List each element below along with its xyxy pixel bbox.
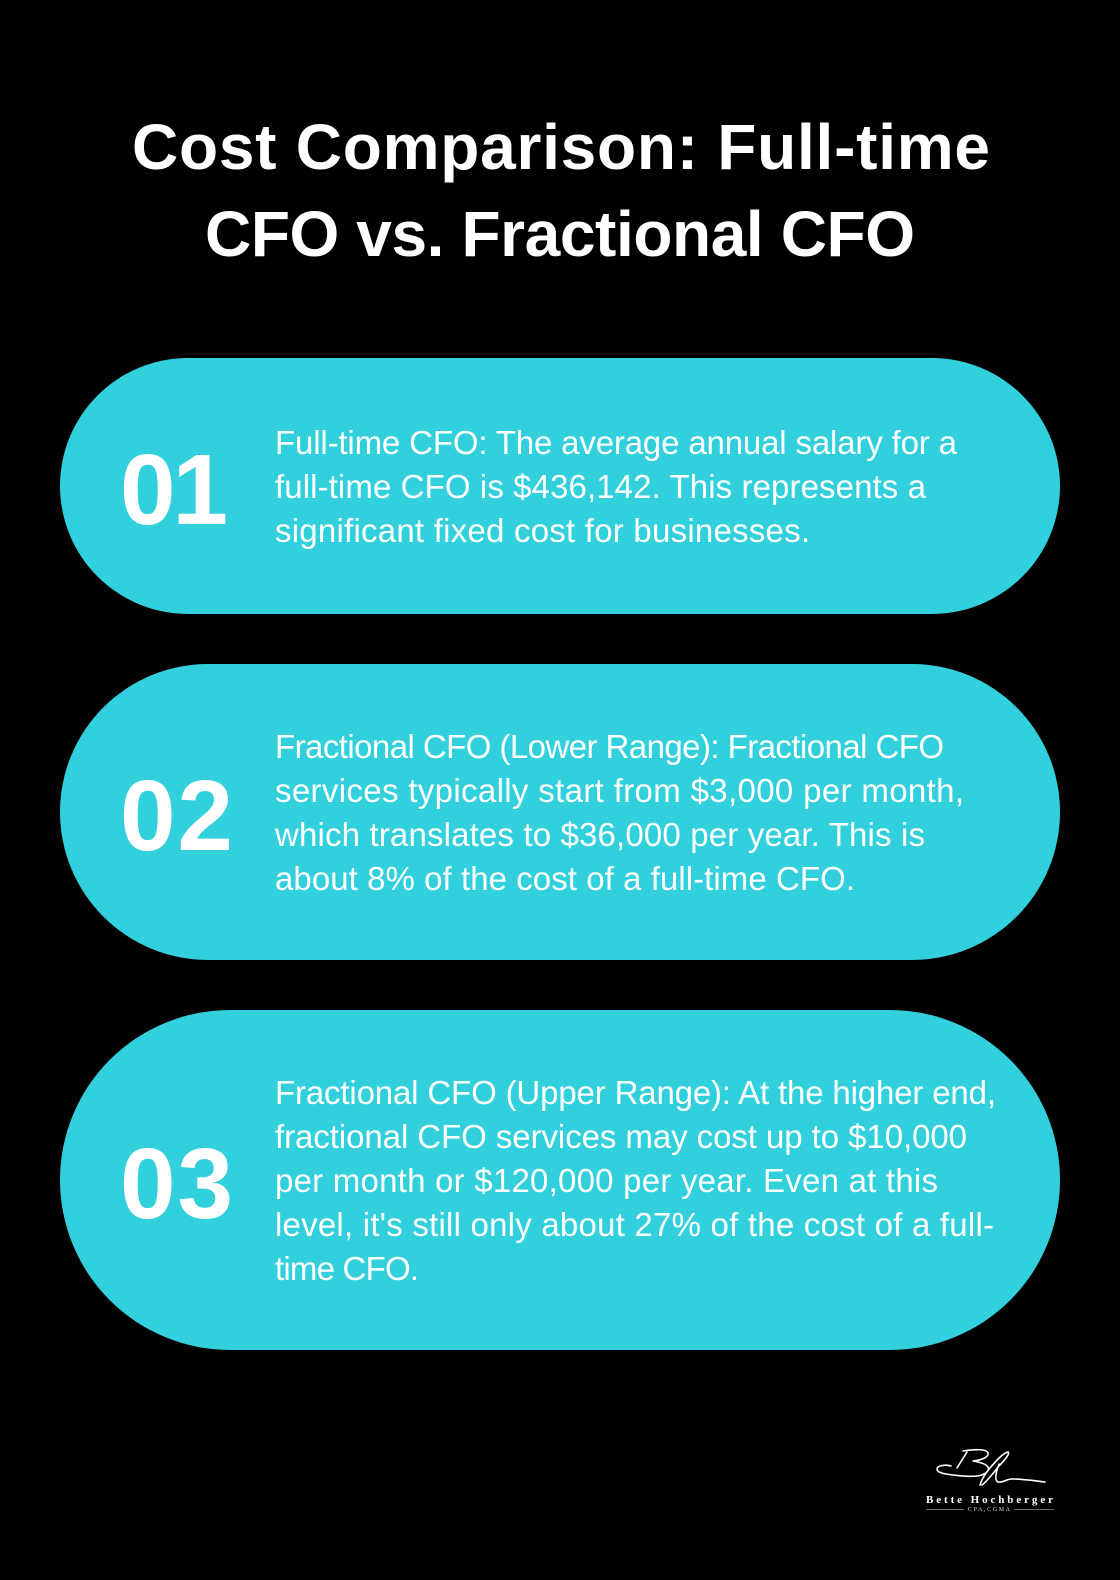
logo credentials: CPA,CGMA <box>968 1507 1011 1513</box>
logo name: Bette Hochberger <box>926 1494 1053 1506</box>
number 02: 02 <box>120 760 233 872</box>
text block 3: per month or $120,000 per year. Even at this <box>275 1162 938 1199</box>
text block 3 <box>275 1074 996 1287</box>
text block 2: which translates to $36,000 per year. This is <box>274 816 925 853</box>
number 03: 03 <box>120 1128 233 1240</box>
number 01: 01 <box>120 434 228 546</box>
logo: Bette Hochberger <box>926 1450 1054 1513</box>
text block 1: Full-time CFO: The average annual salary for a <box>275 424 958 461</box>
panel: fractional CFO upper range <box>60 1010 1060 1350</box>
text block 3: level, it's still only about 27% of the cost of a full- <box>275 1206 994 1243</box>
text block 2: about 8% of the cost of a full-time CFO. <box>275 860 855 897</box>
text block 1 <box>275 424 958 549</box>
text block 3: fractional CFO services may cost up to $10,000 <box>275 1118 967 1155</box>
text block 3: Fractional CFO (Upper Range): At the higher end, <box>275 1074 996 1111</box>
text block 2: Fractional CFO (Lower Range): Fractional CFO <box>275 728 944 765</box>
title <box>132 111 990 270</box>
icon: signature flourish <box>937 1450 1045 1485</box>
pill background 2 <box>60 664 1060 960</box>
pill background 3 <box>60 1010 1060 1350</box>
text block 3: time CFO. <box>275 1250 419 1287</box>
text block 1: full-time CFO is $436,142. This represents a <box>275 468 927 505</box>
panel: fractional CFO lower range <box>60 664 1060 960</box>
pill background 1 <box>60 358 1060 614</box>
title: Cost Comparison: Full-time <box>132 111 990 183</box>
text block 2 <box>274 728 964 897</box>
panel: full-time CFO <box>60 358 1060 614</box>
title: CFO vs. Fractional CFO <box>205 198 915 270</box>
text block 1: significant fixed cost for businesses. <box>275 512 810 549</box>
text block 2: services typically start from $3,000 per month, <box>275 772 964 809</box>
